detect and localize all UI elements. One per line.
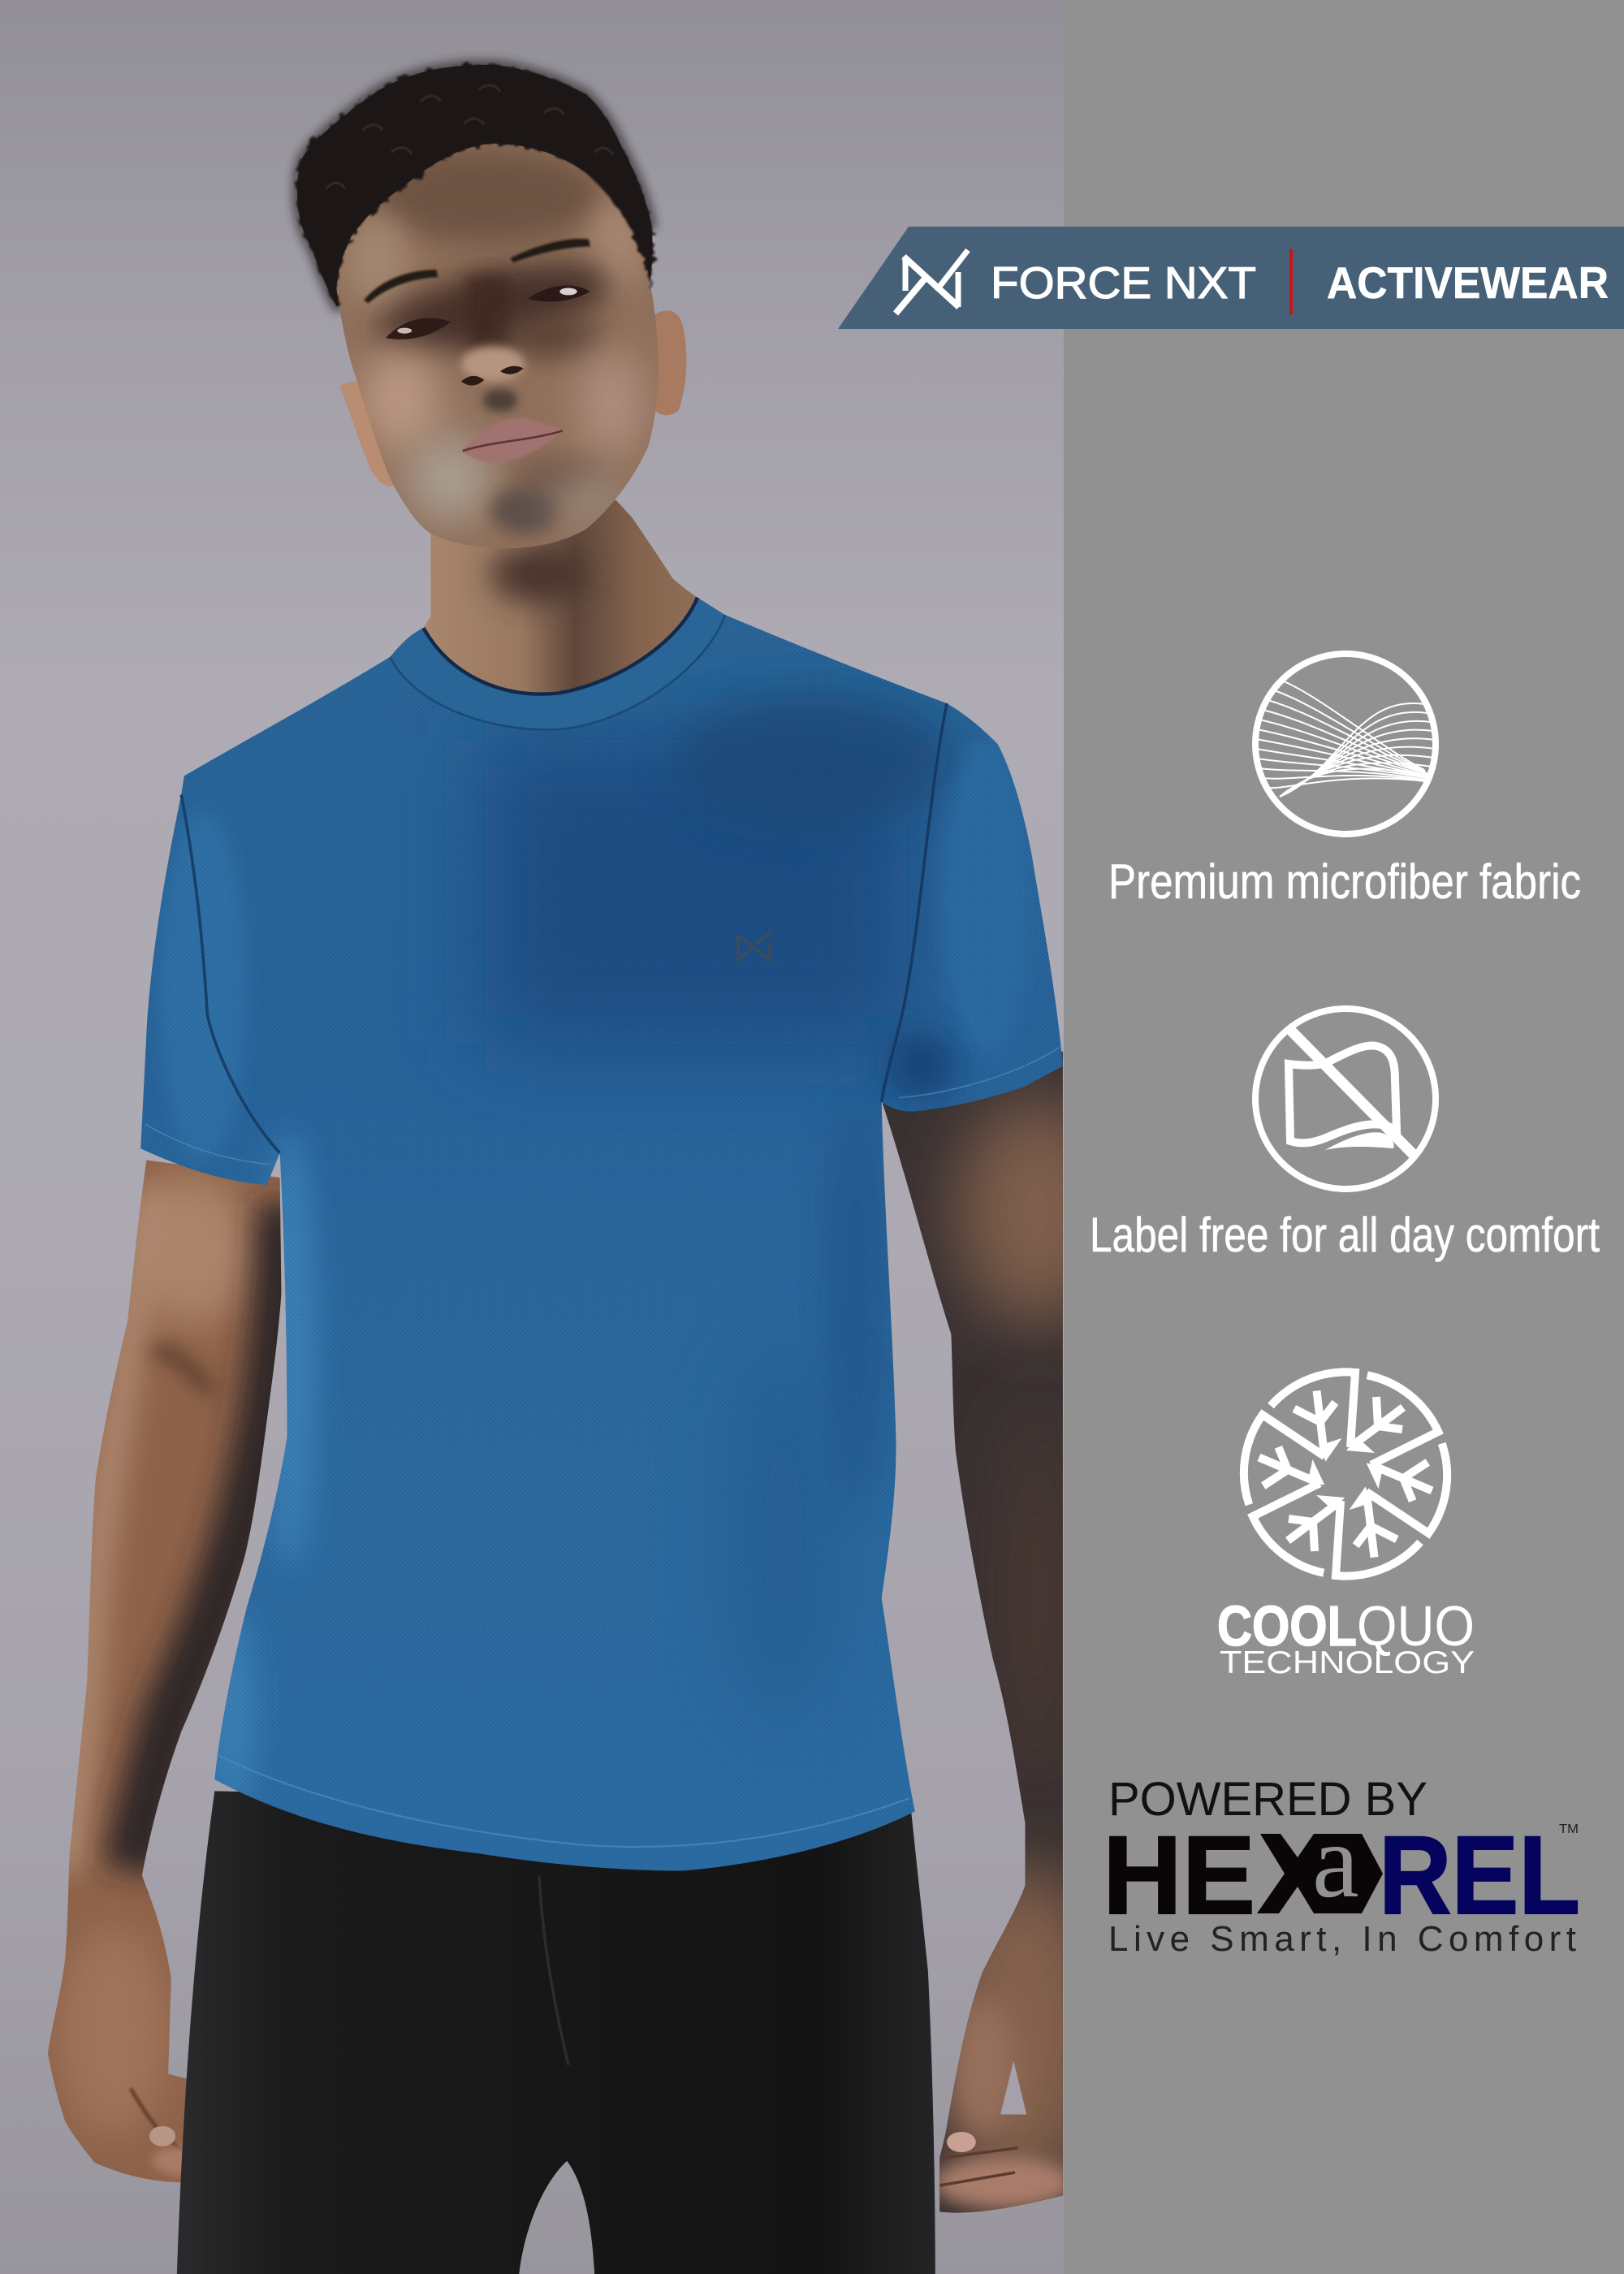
left eyebrow xyxy=(364,270,438,303)
neck xyxy=(421,500,698,697)
category name: ACTIVEWEAR xyxy=(1327,257,1609,308)
feature: coolquo technology xyxy=(1217,1359,1475,1680)
right eye xyxy=(528,286,590,301)
lips xyxy=(463,417,563,463)
hexarel wordmark HE: HE xyxy=(1103,1814,1255,1938)
finger gap xyxy=(1000,2060,1026,2115)
thumb nail right xyxy=(947,2132,976,2152)
left arm and hand xyxy=(48,1161,287,2182)
crew collar xyxy=(390,598,725,729)
coolquo wordmark: COOLQUO xyxy=(1217,1594,1475,1658)
letter a: a xyxy=(1312,1803,1359,1920)
right eyebrow xyxy=(511,239,590,262)
nose xyxy=(461,347,525,382)
collar outer seam xyxy=(390,615,725,729)
photo panel background xyxy=(0,0,1064,2274)
lip line xyxy=(463,430,563,451)
powered by: POWERED BY xyxy=(1108,1773,1427,1826)
icon: snowflake ring xyxy=(1220,1359,1471,1589)
trademark: TM xyxy=(1559,1822,1579,1836)
ear right xyxy=(653,310,686,415)
philtrum shadow xyxy=(483,389,517,412)
ear left xyxy=(339,382,395,486)
X and hexagon shape xyxy=(1257,1834,1383,1913)
icon: fabric waves xyxy=(1255,654,1436,834)
face shading xyxy=(345,149,646,534)
brand banner xyxy=(838,227,1624,329)
icon: crossed out label xyxy=(1255,1009,1436,1189)
hair underlay xyxy=(297,65,653,306)
face xyxy=(336,144,659,548)
banner shape xyxy=(838,227,1624,329)
nostrils xyxy=(461,366,524,386)
brand name: FORCE NXT xyxy=(991,257,1256,308)
hair fuzz xyxy=(297,65,651,306)
hexarel wordmark REL: REL xyxy=(1379,1814,1580,1938)
feature: premium microfiber fabric xyxy=(1108,654,1581,909)
tagline: Live Smart, In Comfort xyxy=(1108,1919,1576,1959)
neck shadow xyxy=(490,545,589,603)
right arm and hand xyxy=(882,1051,1063,2213)
chest logo xyxy=(735,931,773,962)
sleeve seams and hems xyxy=(181,795,280,1153)
hexarel logo block xyxy=(1103,1773,1580,1959)
brand logo icon xyxy=(896,250,968,313)
curly hair xyxy=(297,65,653,306)
red divider xyxy=(1289,249,1293,314)
thumb nail left xyxy=(149,2126,175,2146)
t-shirt xyxy=(131,580,1073,1885)
black shorts xyxy=(177,1791,935,2274)
technology wordmark: TECHNOLOGY xyxy=(1220,1645,1475,1680)
collar inner edge xyxy=(423,598,698,694)
feature: label free xyxy=(1090,1009,1600,1262)
shirt shading xyxy=(131,580,1073,1885)
grey side panel xyxy=(1064,0,1624,2274)
hexarel wordmark X: X xyxy=(1260,1814,1333,1938)
left eye xyxy=(386,318,451,339)
model photo illustration xyxy=(48,65,1116,2274)
finger lines xyxy=(939,2148,1018,2185)
